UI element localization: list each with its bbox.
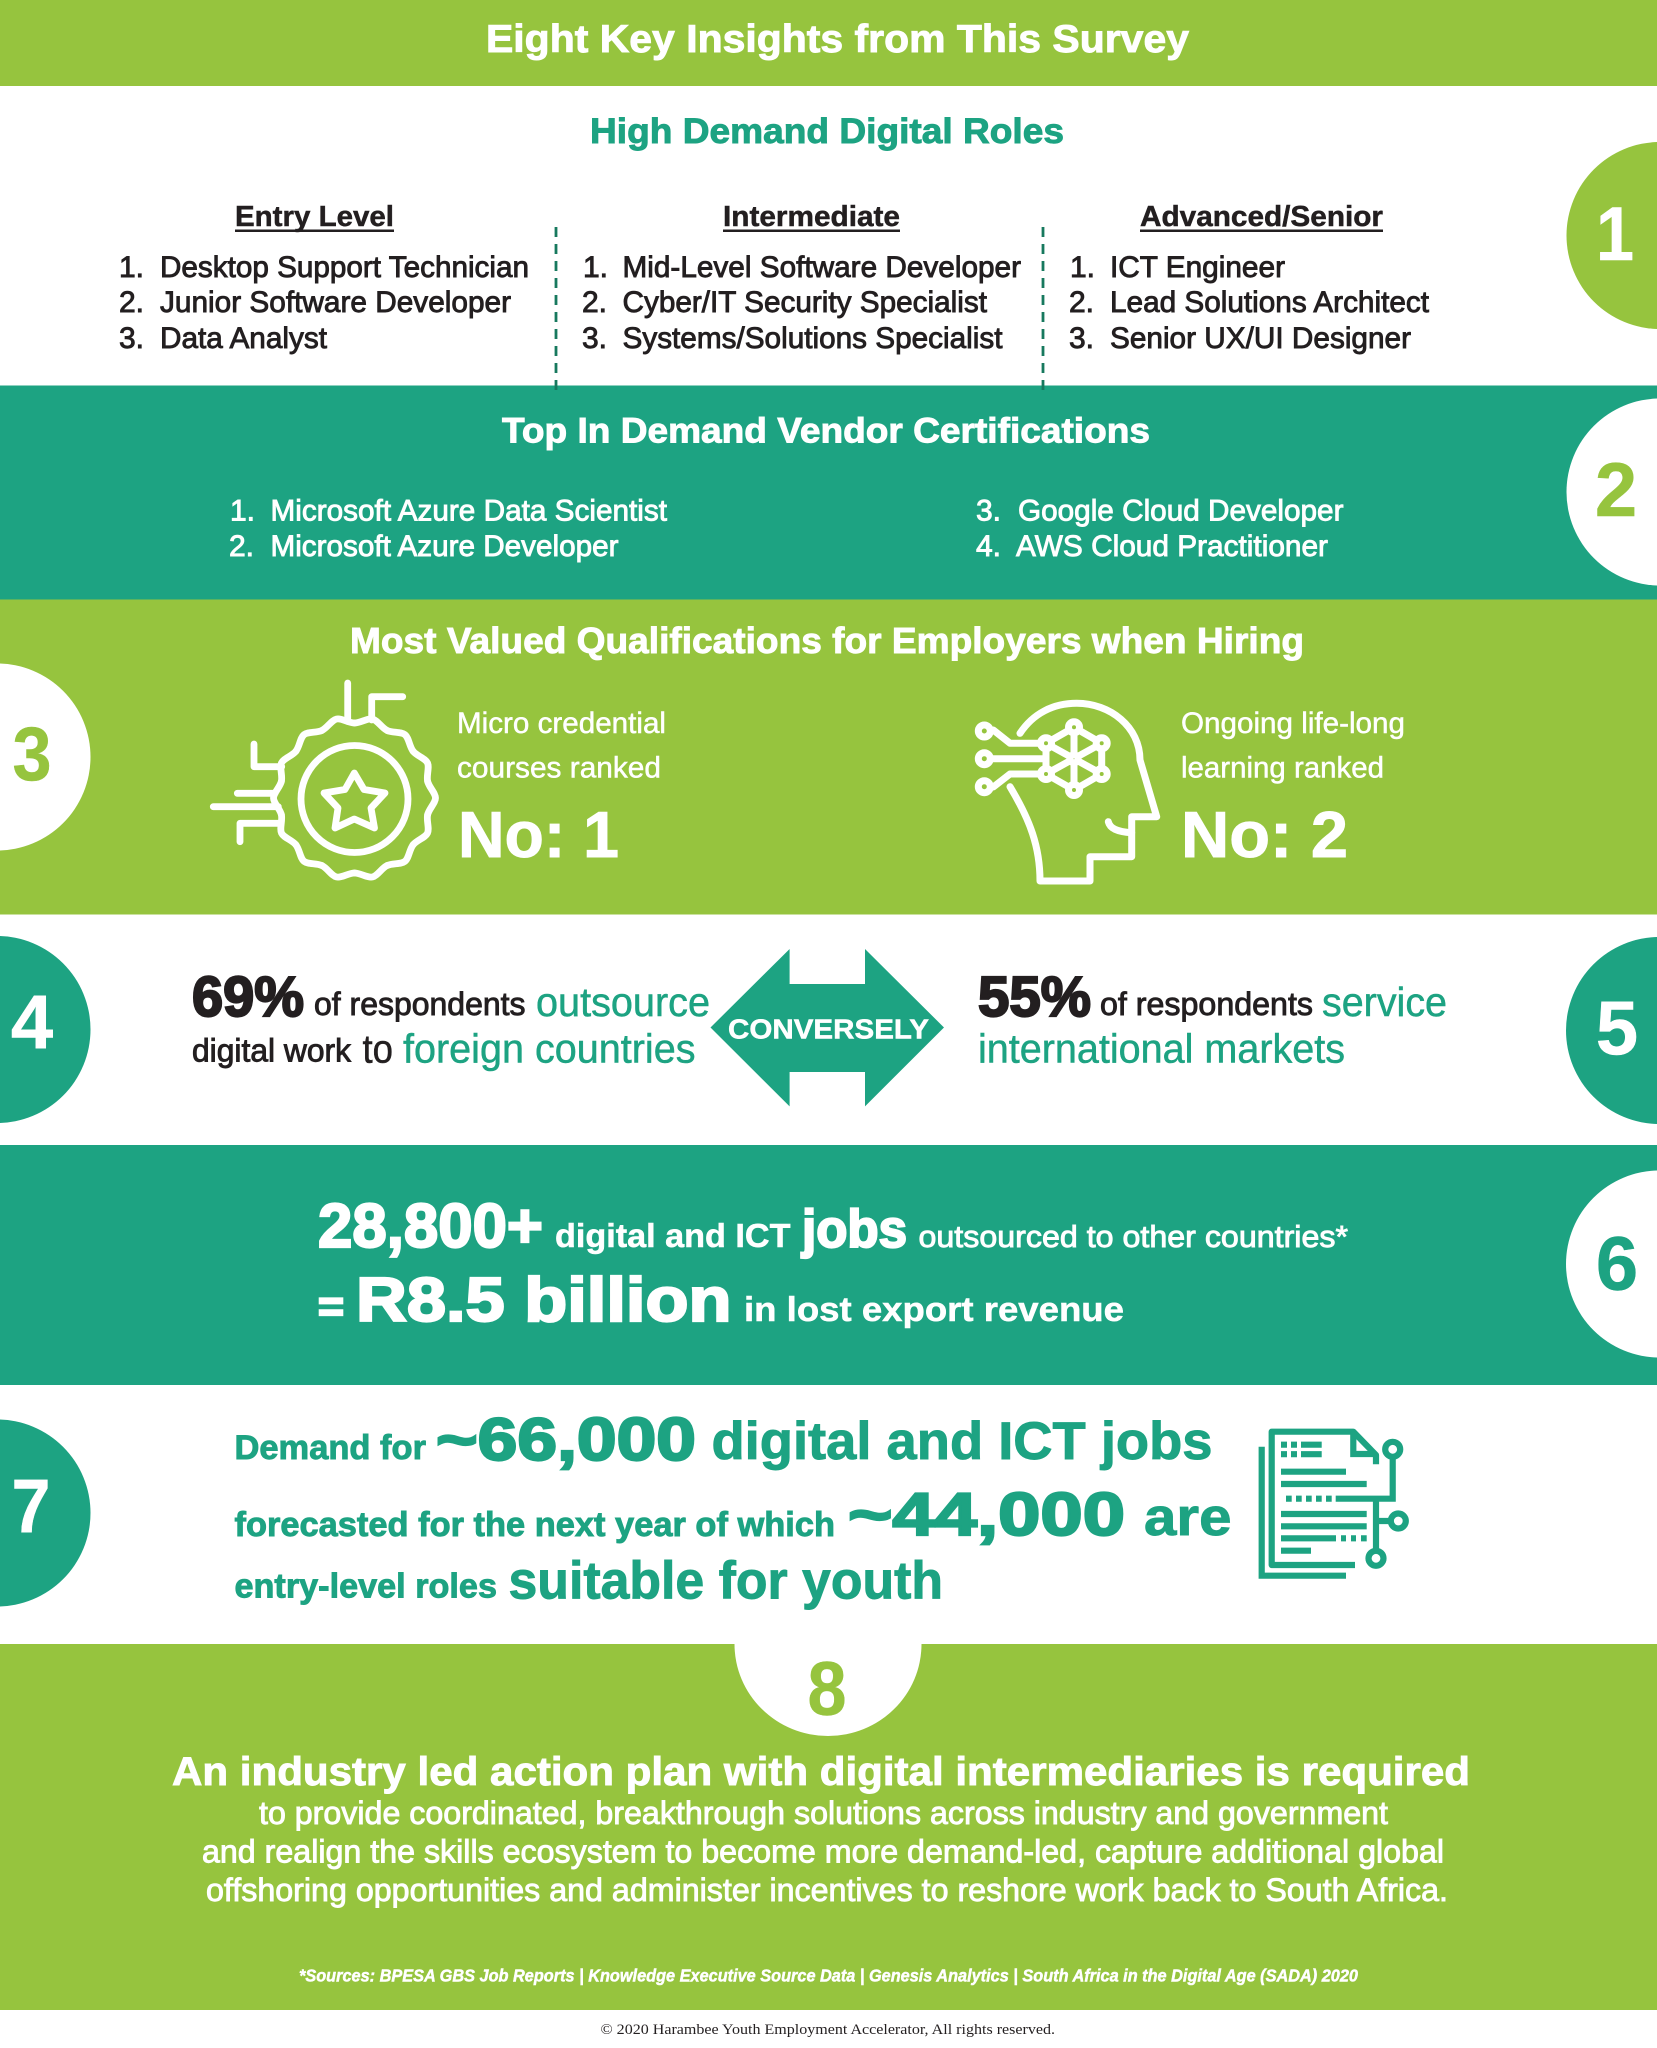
certification list right: 3. [976, 494, 1001, 528]
text: 55 percent service international [978, 965, 1447, 1072]
certification list left: 2. [229, 530, 254, 563]
certification list left: Microsoft Azure Data Scientist [270, 494, 668, 528]
circle badge 1: 1 [1596, 192, 1634, 277]
column: entry level: Data Analyst [160, 322, 328, 355]
text: 55 percent service international: 55% [978, 965, 1091, 1029]
column: entry level: Junior Software Developer [160, 286, 511, 319]
column: advanced senior: 3. [1069, 322, 1094, 355]
text: 69 percent outsource: 69% [192, 965, 304, 1029]
text: demand forecast lines: digital and ICT jobs [712, 1412, 1212, 1471]
arrow: conversely double arrow: CONVERSELY [728, 1014, 929, 1044]
text: 69 percent outsource: foreign countries [403, 1026, 696, 1072]
text: 55 percent service international: of respondents [1100, 986, 1313, 1022]
column: advanced senior: Senior UX/UI Designer [1110, 322, 1411, 355]
certification list right [976, 494, 1344, 563]
text: 28,800+ jobs outsourced: outsourced to other countries* [918, 1219, 1348, 1254]
text: 28,800+ jobs outsourced [318, 1192, 1348, 1261]
column: entry level: 1. [119, 251, 144, 284]
certification list right: Google Cloud Developer [1018, 494, 1344, 528]
text: R8.5 billion lost export revenue: in lost export revenue [744, 1291, 1124, 1329]
title: Eight Key Insights from This Survey [486, 18, 1189, 61]
heading: top in demand vendor certifications: Top In Demand Vendor Certifications [502, 412, 1150, 450]
text: micro credential ranked no 1: No: 1 [458, 798, 619, 871]
text: 69 percent outsource [192, 965, 710, 1072]
circle badge 4: 4 [11, 980, 53, 1065]
text: micro credential ranked no 1 [457, 707, 666, 871]
column: intermediate: 2. [582, 286, 607, 319]
text: 69 percent outsource: outsource [536, 979, 710, 1025]
certification list right: 4. [976, 530, 1001, 563]
column: intermediate [582, 201, 1021, 355]
panel: outsourcing versus servicing [0, 936, 1657, 1124]
certification list left [229, 494, 668, 563]
text: 55 percent service international: service [1322, 979, 1447, 1025]
text: R8.5 billion lost export revenue [318, 1266, 1124, 1335]
arrow: conversely double arrow [710, 949, 944, 1106]
circle badge 6: 6 [1596, 1222, 1638, 1307]
circle badge 8: 8 [808, 1647, 846, 1732]
certification list left: Microsoft Azure Developer [270, 530, 619, 563]
icon: head with neural network [978, 703, 1157, 881]
column: intermediate: Intermediate [723, 201, 900, 233]
panel: forecast demand for jobs [0, 1406, 1406, 1610]
circle badge 2 [1566, 398, 1657, 586]
circle badge 5 [1566, 937, 1657, 1124]
circle badge 7 [0, 1420, 90, 1606]
circle badge 5: 5 [1596, 986, 1638, 1072]
text block: action plan detail [202, 1795, 1448, 1908]
column: intermediate: Mid-Level Software Developer [622, 251, 1021, 284]
text: demand forecast lines: ~44,000 [848, 1481, 1125, 1548]
panel: most valued qualifications [0, 600, 1657, 914]
text: micro credential ranked no 1: Micro credential [457, 707, 666, 740]
copyright footer: © 2020 Harambee Youth Employment Accelerator, All rights reserved. [600, 2022, 1055, 2038]
text block: action plan detail: and realign the skills ecosystem to become more demand-led, capture additional global [202, 1834, 1444, 1870]
column: entry level: Entry Level [235, 201, 394, 233]
circle badge 1 [1566, 142, 1657, 329]
text: lifelong learning ranked no 2 [1181, 707, 1405, 871]
text: 69 percent outsource: of respondents [314, 986, 526, 1022]
text: R8.5 billion lost export revenue: R8.5 billion [356, 1266, 732, 1335]
heading: industry led action plan: An industry led action plan with digital intermediaries is required [172, 1750, 1470, 1794]
column: advanced senior: Lead Solutions Architect [1110, 286, 1430, 319]
column: entry level: 3. [119, 322, 144, 355]
icon: document with circuit nodes [1262, 1432, 1406, 1576]
panel: vendor certifications [0, 386, 1657, 600]
text block: action plan detail: to provide coordinated, breakthrough solutions across industry and government [259, 1795, 1388, 1831]
text: demand forecast lines: Demand for [234, 1429, 426, 1467]
circle badge 3 [0, 664, 90, 850]
text: 28,800+ jobs outsourced: jobs [801, 1200, 907, 1259]
column: intermediate: Systems/Solutions Specialist [622, 322, 1003, 355]
panel: high demand digital roles [119, 112, 1657, 355]
text: 28,800+ jobs outsourced: 28,800+ [318, 1192, 543, 1261]
circle badge 4 [0, 936, 90, 1123]
text: demand forecast lines: forecasted for the next year of which [234, 1506, 835, 1544]
circle badge 8 [734, 1644, 922, 1736]
column: intermediate: 3. [582, 322, 607, 355]
text: micro credential ranked no 1: courses ranked [457, 752, 661, 784]
column: intermediate: Cyber/IT Security Specialist [622, 286, 988, 319]
column: entry level: Desktop Support Technician [160, 251, 529, 284]
panel: outsourced jobs and lost revenue [0, 1145, 1657, 1385]
text: 69 percent outsource: to [362, 1028, 393, 1072]
column: advanced senior: 2. [1069, 286, 1094, 319]
heading: most valued qualifications: Most Valued Qualifications for Employers when Hiring [350, 620, 1304, 661]
text: demand forecast lines: entry-level roles [234, 1568, 497, 1606]
circle badge 2: 2 [1595, 448, 1637, 533]
text: 55 percent service international: international markets [978, 1026, 1345, 1072]
column: advanced senior: Advanced/Senior [1140, 201, 1383, 233]
column: advanced senior: ICT Engineer [1110, 251, 1285, 284]
text: demand forecast lines: are [1144, 1488, 1232, 1547]
certification list left: 1. [230, 494, 255, 528]
text: R8.5 billion lost export revenue: = [318, 1282, 344, 1331]
text: demand forecast lines: suitable for youth [508, 1552, 943, 1610]
text: lifelong learning ranked no 2: learning ranked [1181, 752, 1384, 784]
text: demand forecast lines: ~66,000 [436, 1406, 696, 1473]
circle badge 7: 7 [12, 1464, 50, 1550]
text: 28,800+ jobs outsourced: digital and ICT [555, 1217, 790, 1254]
circle badge 6 [1566, 1170, 1657, 1358]
text: lifelong learning ranked no 2: No: 2 [1181, 798, 1348, 871]
column: advanced senior: 1. [1070, 251, 1095, 284]
title banner [0, 0, 1657, 86]
text: lifelong learning ranked no 2: Ongoing life-long [1181, 707, 1405, 740]
sources note: *Sources: BPESA GBS Job Reports | Knowledge Executive Source Data | Genesis Analytics | South Africa in the Digital Age (SADA) 2020 [299, 1966, 1358, 1986]
circle badge 3: 3 [12, 712, 52, 797]
text: 69 percent outsource: digital work [192, 1032, 352, 1068]
column: entry level [119, 201, 529, 355]
panel: action plan conclusion [0, 1644, 1657, 2010]
column: intermediate: 1. [583, 251, 608, 284]
certification list right: AWS Cloud Practitioner [1016, 530, 1328, 563]
column: entry level: 2. [119, 286, 144, 319]
icon: badge with star and circuit lines [213, 683, 436, 881]
text block: action plan detail: offshoring opportunities and administer incentives to reshore work back to South Africa. [206, 1872, 1448, 1908]
text: demand forecast lines [234, 1406, 1232, 1610]
heading: high demand digital roles: High Demand Digital Roles [590, 112, 1064, 151]
column: advanced senior [1069, 201, 1430, 355]
